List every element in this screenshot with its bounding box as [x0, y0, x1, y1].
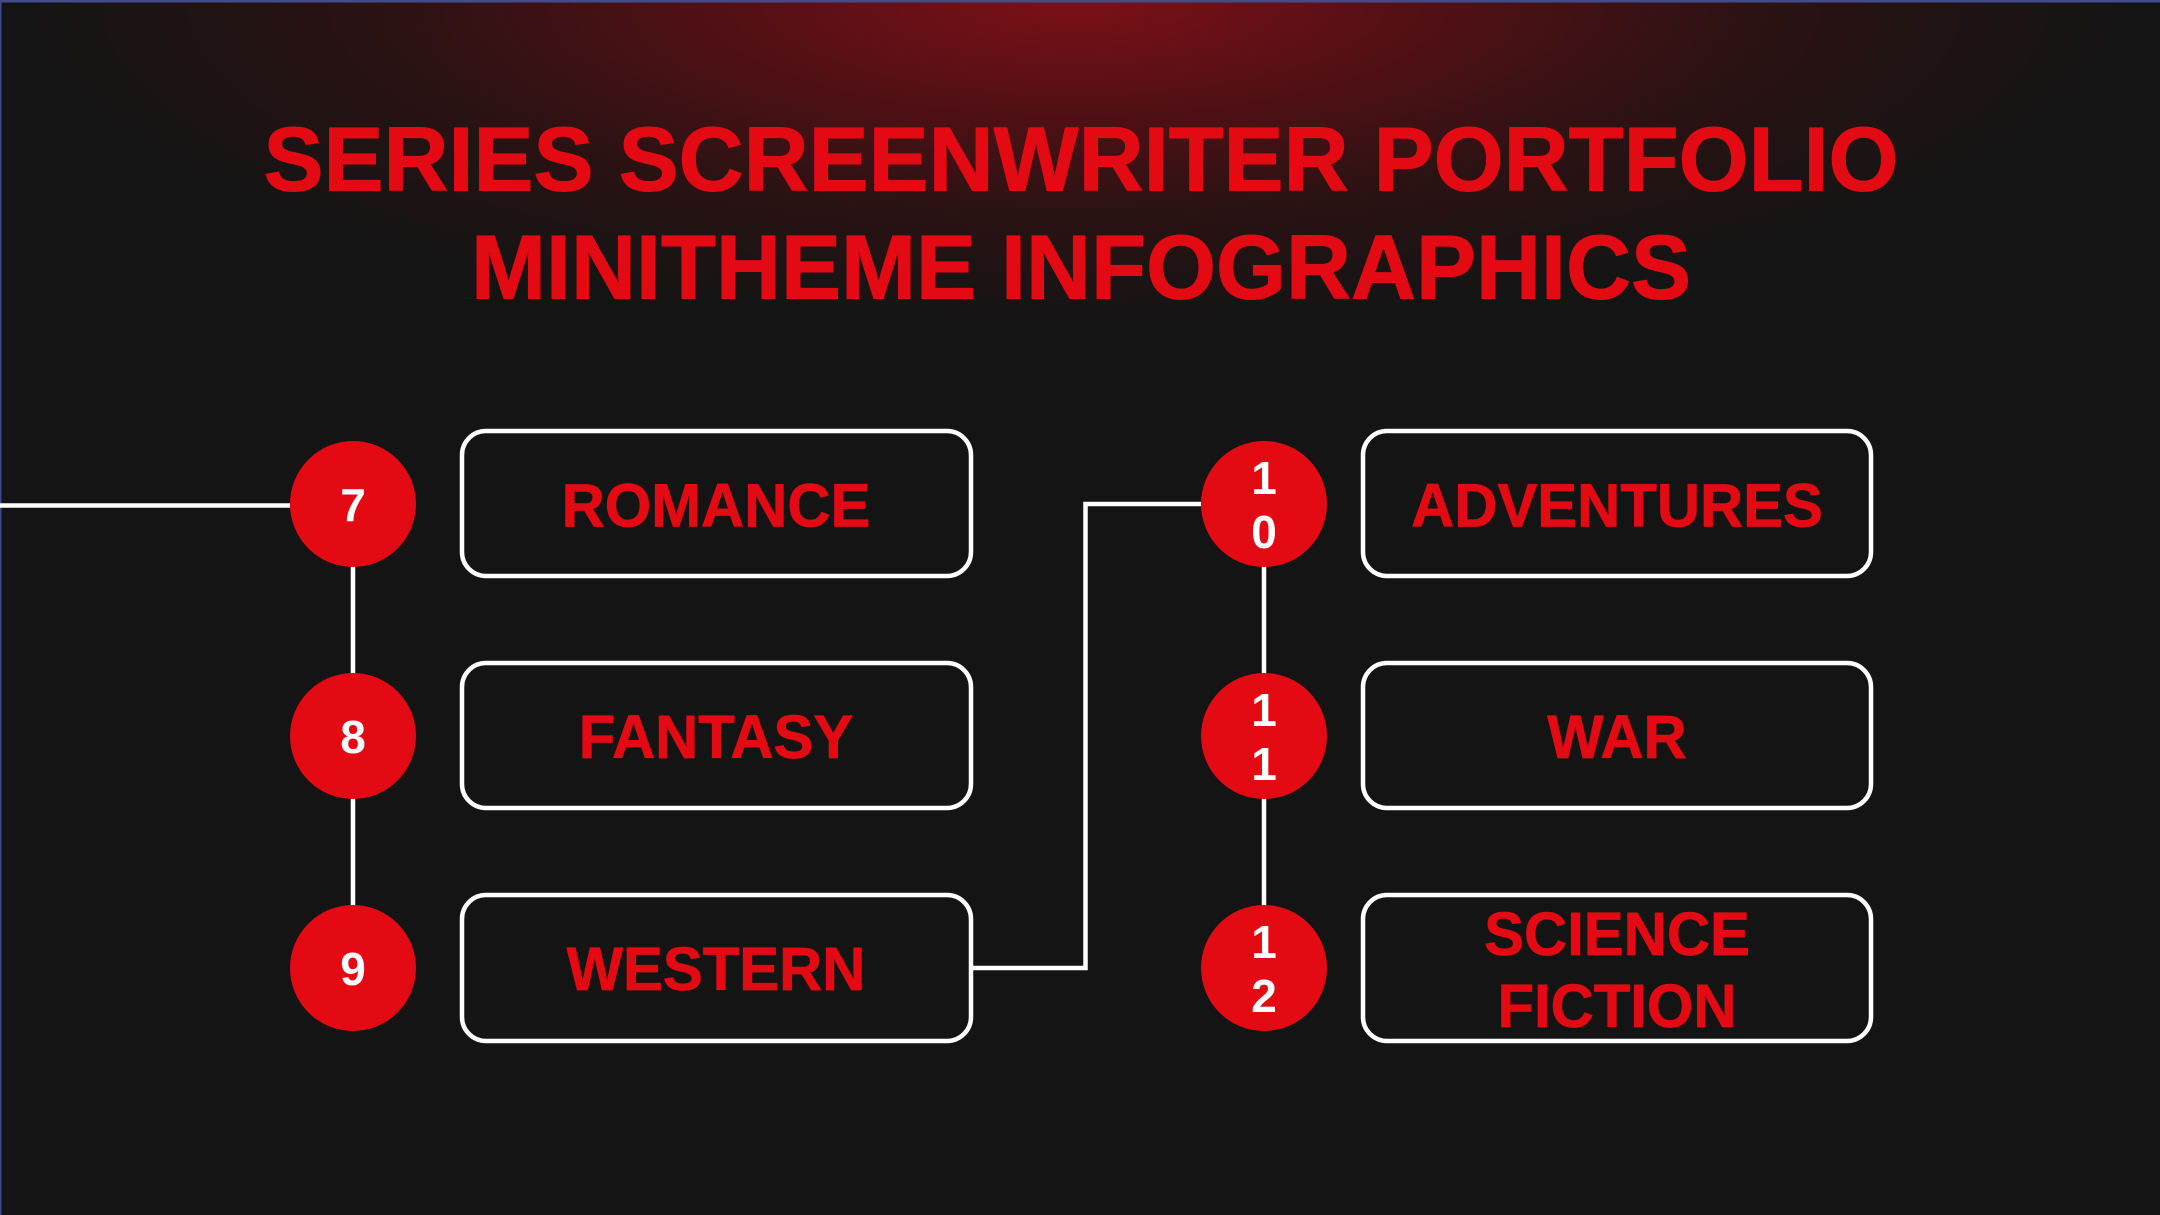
- box: western: [462, 895, 971, 1041]
- node 11: 1: [1251, 738, 1277, 790]
- box: war: [1363, 663, 1871, 808]
- connector: nodes 10 to 12: [1262, 504, 1266, 968]
- box: science fiction: SCIENCE: [1484, 899, 1750, 968]
- node 8: 8: [340, 711, 366, 763]
- node 9: 9: [340, 943, 366, 995]
- box: fantasy: [462, 663, 971, 808]
- node 11: [1201, 673, 1327, 799]
- connector: western to adventures: [973, 504, 1201, 968]
- node 7: [290, 441, 416, 567]
- node 10: 1: [1251, 452, 1277, 504]
- box: western: WESTERN: [567, 934, 865, 1003]
- box: adventures: ADVENTURES: [1411, 471, 1823, 540]
- box: fantasy: FANTASY: [579, 702, 853, 771]
- node 12: 2: [1251, 970, 1277, 1022]
- title: MINITHEME INFOGRAPHICS: [471, 217, 1691, 319]
- node 12: [1201, 905, 1327, 1031]
- box: science fiction: FICTION: [1497, 971, 1737, 1040]
- node 8: [290, 673, 416, 799]
- node 12: 1: [1251, 916, 1277, 968]
- box: war: WAR: [1547, 702, 1687, 771]
- box: science fiction: [1363, 895, 1871, 1041]
- node 10: [1201, 441, 1327, 567]
- node 10: 0: [1251, 506, 1277, 558]
- connector: incoming line to node 7: [0, 503, 290, 508]
- title: [263, 109, 1899, 319]
- node 7: 7: [340, 479, 366, 531]
- node 11: 1: [1251, 684, 1277, 736]
- title: SERIES SCREENWRITER PORTFOLIO: [263, 109, 1899, 211]
- box: romance: [462, 431, 971, 576]
- box: romance: ROMANCE: [562, 471, 870, 540]
- connector: nodes 7 to 9: [351, 504, 355, 968]
- box: adventures: [1363, 431, 1871, 576]
- node 9: [290, 905, 416, 1031]
